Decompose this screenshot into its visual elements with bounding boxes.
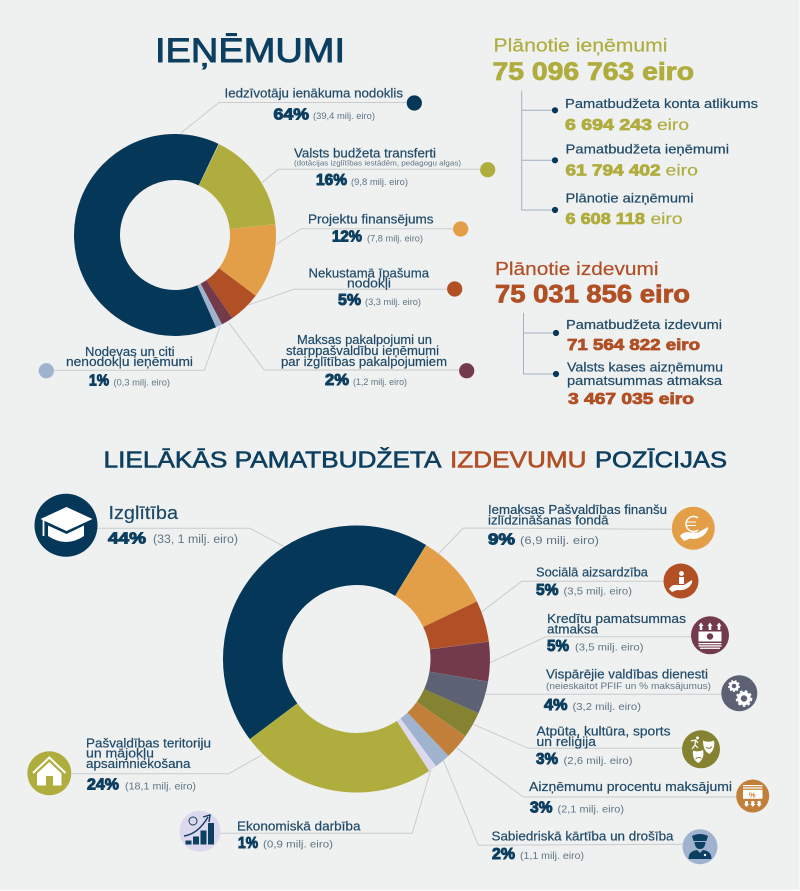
icon: banknote with percent: % bbox=[749, 790, 756, 800]
callout: Valsts budžeta transferti 16%: (dotācijas izglītības iestādēm, pedagogu algas) bbox=[294, 159, 462, 168]
item: Pamatbudžeta konta atlikums bbox=[565, 97, 758, 134]
callout: Pašvaldības teritoriju un mājokļu apsaimniekošana 24%: 24% bbox=[87, 776, 119, 794]
item: Valsts kases aizņēmumu pamatsummas atmaksa: Valsts kases aizņēmumu bbox=[567, 361, 723, 375]
callout: Pašvaldības teritoriju un mājokļu apsaimniekošana 24%: (18,1 milj. eiro) bbox=[125, 780, 196, 792]
item: Pamatbudžeta konta atlikums: eiro bbox=[657, 117, 689, 134]
item: Pamatbudžeta ieņēmumi: 61 794 402 bbox=[566, 163, 661, 180]
callout: Ekonomiskā darbība 1%: (0,9 milj. eiro) bbox=[263, 839, 333, 851]
callout: Nekustamā īpašuma nodokļi 5%: Nekustamā īpašuma bbox=[308, 267, 429, 281]
callout: Maksas pakalpojumi 2%: starppašvaldību ieņēmumi bbox=[286, 344, 439, 358]
total: 75 031 856 eiro: 75 031 856 eiro bbox=[495, 281, 690, 309]
panel: planned revenue bbox=[492, 36, 758, 228]
callout: Aizņēmumu procentu maksājumi 3%: (2,1 milj. eiro) bbox=[558, 803, 624, 815]
chart: expenses donut bbox=[210, 512, 503, 806]
callout: Nodevas un citi nenodokļu ieņēmumi 1%: Nodevas un citi bbox=[85, 345, 174, 359]
icon: theatre masks and runner bbox=[682, 730, 720, 768]
callout: Atpūta, kultūra, sports un reliģija 3% bbox=[473, 724, 720, 768]
item: Plānotie aizņēmumi: eiro bbox=[650, 211, 683, 228]
callout: Ekonomiskā darbība 1%: 1% bbox=[238, 835, 258, 852]
callout: Valsts budžeta transferti 16%: (9,8 milj. eiro) bbox=[351, 177, 408, 188]
heading: LIELĀKĀS PAMATBUDŽETA IZDEVUMU POZĪCIJAS: LIELĀKĀS PAMATBUDŽETA bbox=[104, 446, 442, 472]
item: Pamatbudžeta izdevumi bbox=[566, 318, 722, 354]
icon: graduation cap bbox=[34, 494, 98, 557]
item: Valsts kases aizņēmumu pamatsummas atmaksa: 3 467 035 eiro bbox=[568, 391, 694, 408]
callout: Iemaksas Pašvaldības finanšu izlīdzināšanas fondā 9%: (6,9 milj. eiro) bbox=[520, 535, 599, 547]
callout: Iedzīvotāju ienākuma nodoklis 64%: 64% bbox=[274, 106, 309, 124]
callout: Atpūta, kultūra, sports un reliģija 3%: Atpūta, kultūra, sports bbox=[536, 725, 670, 739]
item: Valsts kases aizņēmumu pamatsummas atmaksa: pamatsummas atmaksa bbox=[567, 374, 722, 388]
icon: banknotes with arrows bbox=[691, 616, 729, 654]
icon: hand with person bbox=[664, 564, 698, 598]
heading: LIELĀKĀS PAMATBUDŽETA IZDEVUMU POZĪCIJAS bbox=[104, 446, 727, 472]
callout: Vispārējie valdības dienesti 4% bbox=[485, 668, 757, 714]
callout: Iemaksas Pašvaldības finanšu izlīdzināšanas fondā 9%: Iemaksas Pašvaldības finanšu bbox=[488, 503, 667, 517]
callout: Sociālā aizsardzība 5%: 5% bbox=[536, 582, 558, 599]
callout: Sabiedriskā kārtība un drošība 2%: Sabiedriskā kārtība un drošība bbox=[492, 830, 674, 844]
heading: LIELĀKĀS PAMATBUDŽETA IZDEVUMU POZĪCIJAS: POZĪCIJAS bbox=[595, 446, 727, 472]
item: Pamatbudžeta ieņēmumi: Pamatbudžeta ieņēmumi bbox=[566, 142, 729, 156]
callout: Izglītība 44%: Izglītība bbox=[108, 503, 179, 523]
callout: Nekustamā īpašuma nodokļi 5%: nodokļi bbox=[347, 277, 391, 291]
icon: house bbox=[27, 751, 71, 795]
callout: Maksas pakalpojumi 2%: Maksas pakalpojumi un bbox=[297, 333, 432, 347]
item: Valsts kases aizņēmumu pamatsummas atmaksa bbox=[567, 361, 723, 408]
callout: Pašvaldības teritoriju un mājokļu apsaimniekošana 24%: Pašvaldības teritoriju bbox=[86, 736, 211, 750]
callout: Iemaksas Pašvaldības finanšu izlīdzināšanas fondā 9%: izlīdzināšanas fondā bbox=[488, 514, 609, 528]
heading: Plānotie izdevumi: Plānotie izdevumi bbox=[495, 259, 658, 279]
callout: Maksas pakalpojumi 2% bbox=[229, 323, 474, 389]
callout: Sociālā aizsardzība 5%: Sociālā aizsardzība bbox=[536, 566, 648, 580]
callout: Izglītība 44% bbox=[34, 494, 284, 557]
callout: Vispārējie valdības dienesti 4%: 4% bbox=[544, 697, 568, 714]
callout: Projektu finansējums 12% bbox=[277, 212, 468, 246]
tree connector bbox=[524, 313, 559, 377]
item: Plānotie aizņēmumi bbox=[566, 191, 694, 228]
callout: Atpūta, kultūra, sports un reliģija 3%: (2,6 milj. eiro) bbox=[564, 755, 632, 767]
panel: planned expenses bbox=[495, 259, 723, 408]
callout: Aizņēmumu procentu maksājumi 3% bbox=[456, 747, 769, 816]
callout: Sociālā aizsardzība 5%: (3,5 milj. eiro) bbox=[564, 586, 632, 598]
callout: Projektu finansējums 12%: Projektu finansējums bbox=[308, 212, 434, 226]
callout: Pašvaldības teritoriju un mājokļu apsaimniekošana 24%: un mājokļu bbox=[86, 746, 154, 760]
callout: Kredītu pamatsummas atmaksa 5% bbox=[490, 612, 729, 663]
callout: Valsts budžeta transferti 16% bbox=[262, 147, 495, 189]
callout: Nekustamā īpašuma nodokļi 5% bbox=[248, 267, 462, 309]
heading: Plānotie ieņēmumi: Plānotie ieņēmumi bbox=[494, 36, 668, 56]
callout: Maksas pakalpojumi 2%: 2% bbox=[325, 372, 349, 389]
callout: Vispārējie valdības dienesti 4%: (neieskaitot PFIF un % maksājumus) bbox=[546, 681, 711, 691]
item: Pamatbudžeta izdevumi: 71 564 822 eiro bbox=[567, 337, 700, 354]
callout: Nodevas un citi nenodokļu ieņēmumi 1%: 1% bbox=[89, 373, 109, 390]
callout: Nodevas un citi nenodokļu ieņēmumi 1% bbox=[39, 327, 220, 390]
callout: Sabiedriskā kārtība un drošība 2% bbox=[443, 760, 718, 864]
callout: Pašvaldības teritoriju un mājokļu apsaimniekošana 24% bbox=[27, 736, 262, 795]
callout: Ekonomiskā darbība 1%: Ekonomiskā darbība bbox=[237, 820, 361, 834]
callout: Nekustamā īpašuma nodokļi 5%: (3,3 milj. eiro) bbox=[365, 297, 421, 308]
callout: Ekonomiskā darbība 1% bbox=[180, 770, 431, 852]
icon: banknote with percent bbox=[736, 780, 769, 812]
callout: Maksas pakalpojumi 2%: par izglītības pakalpojumiem bbox=[281, 355, 447, 369]
icon: growth chart bbox=[180, 811, 220, 852]
item: Pamatbudžeta konta atlikums: 6 694 243 bbox=[565, 117, 652, 134]
callout: Valsts budžeta transferti 16%: Valsts budžeta transferti bbox=[294, 147, 436, 161]
tree connector bbox=[522, 91, 558, 213]
callout: Kredītu pamatsummas atmaksa 5%: 5% bbox=[547, 638, 569, 655]
callout: Valsts budžeta transferti 16%: 16% bbox=[316, 172, 347, 189]
callout: Iedzīvotāju ienākuma nodoklis 64%: Iedzīvotāju ienākuma nodoklis bbox=[224, 86, 403, 100]
callout: Vispārējie valdības dienesti 4%: (3,2 milj. eiro) bbox=[572, 701, 641, 713]
item: Pamatbudžeta izdevumi: Pamatbudžeta izdevumi bbox=[566, 318, 722, 332]
callout: Iedzīvotāju ienākuma nodoklis 64% bbox=[181, 86, 422, 133]
icon: hand with euro bbox=[672, 507, 715, 550]
item: Plānotie aizņēmumi: Plānotie aizņēmumi bbox=[566, 191, 694, 205]
item: Pamatbudžeta ieņēmumi bbox=[566, 142, 729, 180]
callout: Kredītu pamatsummas atmaksa 5%: Kredītu pamatsummas bbox=[547, 612, 686, 626]
callout: Iemaksas Pašvaldības finanšu izlīdzināšanas fondā 9% bbox=[438, 503, 715, 554]
callout: Iedzīvotāju ienākuma nodoklis 64%: (39,4 milj. eiro) bbox=[313, 111, 375, 122]
icon: gears bbox=[721, 675, 757, 711]
callout: Sabiedriskā kārtība un drošība 2%: (1,1 milj. eiro) bbox=[520, 850, 584, 862]
total: 75 096 763 eiro: 75 096 763 eiro bbox=[492, 58, 694, 86]
icon: police officer bbox=[682, 829, 718, 864]
callout: Izglītība 44%: (33, 1 milj. eiro) bbox=[153, 534, 238, 546]
callout: Nodevas un citi nenodokļu ieņēmumi 1%: (0,3 milj. eiro) bbox=[114, 378, 170, 389]
callout: Kredītu pamatsummas atmaksa 5%: atmaksa bbox=[547, 622, 598, 636]
heading: LIELĀKĀS PAMATBUDŽETA IZDEVUMU POZĪCIJAS: IZDEVUMU bbox=[450, 446, 586, 472]
title: IEŅĒMUMI: IEŅĒMUMI bbox=[155, 32, 345, 70]
callout: Projektu finansējums 12%: (7,8 milj. eiro) bbox=[367, 234, 423, 245]
callout: Sociālā aizsardzība 5% bbox=[482, 564, 698, 612]
item: Plānotie aizņēmumi: 6 608 118 bbox=[566, 211, 645, 228]
item: Pamatbudžeta konta atlikums: Pamatbudžeta konta atlikums bbox=[565, 97, 758, 111]
callout: Maksas pakalpojumi 2%: (1,2 milj. eiro) bbox=[353, 377, 407, 388]
callout: Aizņēmumu procentu maksājumi 3%: 3% bbox=[530, 800, 552, 816]
callout: Izglītība 44%: 44% bbox=[108, 530, 146, 548]
item: Pamatbudžeta ieņēmumi: eiro bbox=[666, 163, 698, 180]
chart: revenue donut bbox=[66, 126, 284, 344]
callout: Projektu finansējums 12%: 12% bbox=[332, 229, 362, 246]
callout: Sabiedriskā kārtība un drošība 2%: 2% bbox=[492, 846, 515, 863]
callout: Atpūta, kultūra, sports un reliģija 3%: un reliģija bbox=[536, 735, 596, 749]
callout: Iemaksas Pašvaldības finanšu izlīdzināšanas fondā 9%: 9% bbox=[488, 531, 515, 548]
callout: Nodevas un citi nenodokļu ieņēmumi 1%: nenodokļu ieņēmumi bbox=[66, 355, 193, 369]
callout: Pašvaldības teritoriju un mājokļu apsaimniekošana 24%: apsaimniekošana bbox=[86, 757, 191, 771]
callout: Nekustamā īpašuma nodokļi 5%: 5% bbox=[338, 292, 361, 309]
callout: Aizņēmumu procentu maksājumi 3%: Aizņēmumu procentu maksājumi bbox=[529, 780, 732, 794]
callout: Kredītu pamatsummas atmaksa 5%: (3,5 milj. eiro) bbox=[575, 642, 644, 654]
callout: Vispārējie valdības dienesti 4%: Vispārējie valdības dienesti bbox=[546, 668, 708, 682]
callout: Atpūta, kultūra, sports un reliģija 3%: 3% bbox=[536, 751, 558, 768]
